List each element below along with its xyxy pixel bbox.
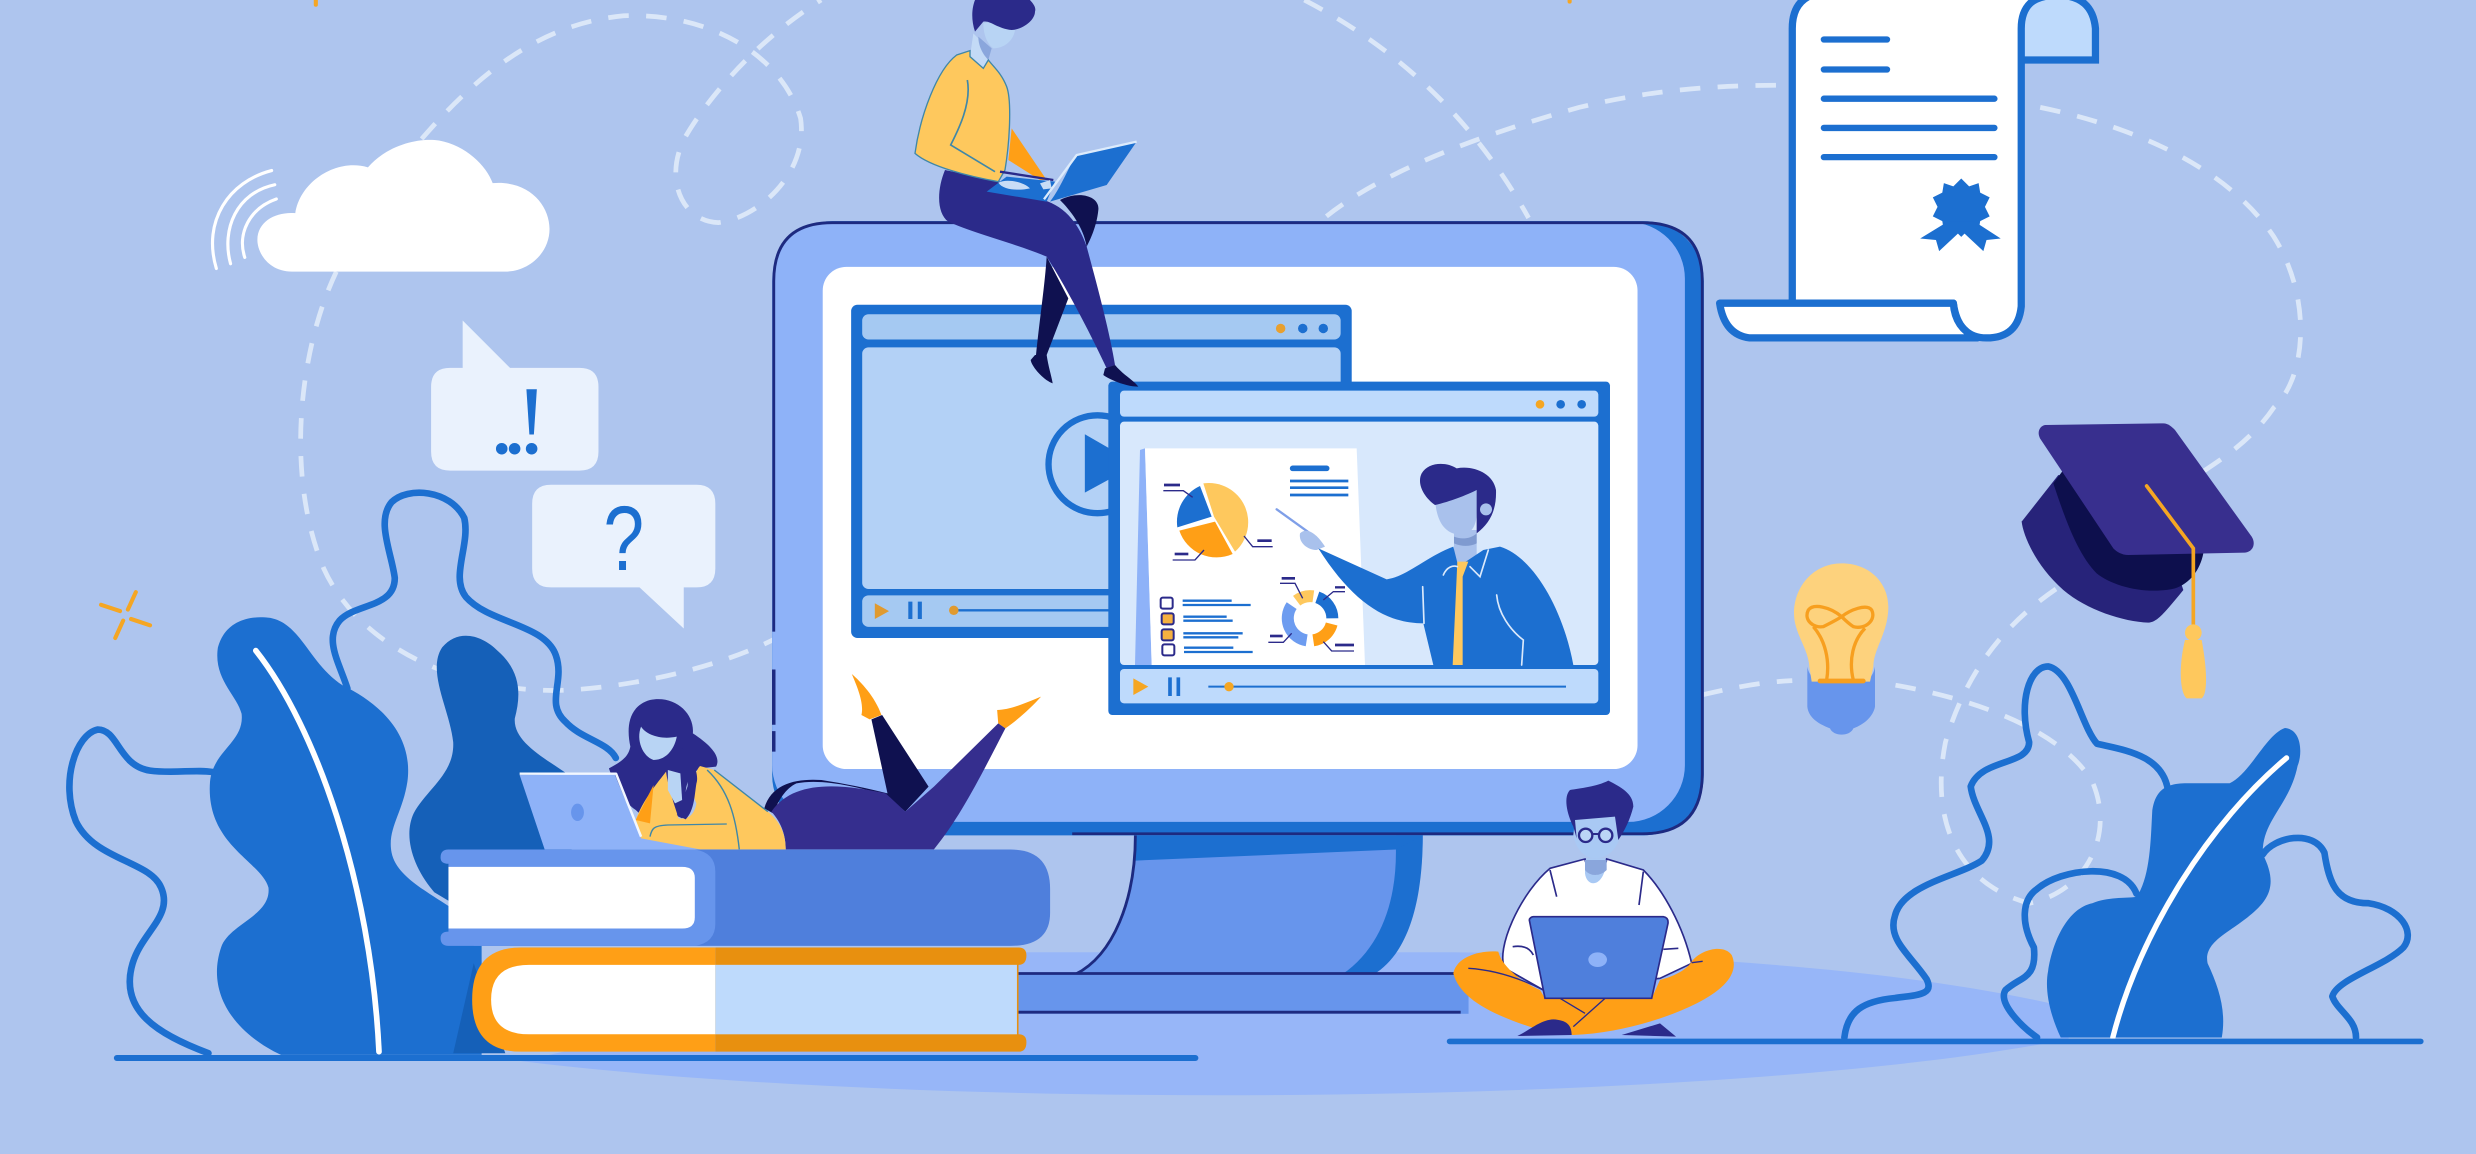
dashed connector paths <box>301 0 2301 903</box>
diploma scroll <box>1720 0 2095 338</box>
face and hair <box>983 23 1015 48</box>
seal <box>1920 178 2001 251</box>
tassel <box>2147 486 2206 698</box>
icon: cloud with wifi arcs <box>213 140 550 272</box>
neck <box>1585 858 1607 883</box>
laptop <box>987 142 1137 202</box>
trousers <box>1453 949 1734 1035</box>
shirt <box>1503 859 1692 990</box>
speech bubble: exclamation: ..! <box>490 367 548 475</box>
monitor stand <box>1019 835 1469 1014</box>
text lines <box>1293 460 1327 477</box>
presentation board <box>1135 448 1365 665</box>
pie chart <box>1163 483 1273 560</box>
ground line, right <box>1450 1040 2421 1043</box>
plant: big leaf <box>210 617 482 1055</box>
icon: light bulb <box>1794 563 1888 735</box>
sweater <box>636 766 786 849</box>
books stack <box>441 850 1050 1053</box>
teacher <box>1277 464 1573 665</box>
hair <box>609 699 717 818</box>
woman lying on books with laptop <box>520 674 1041 849</box>
neck <box>970 33 990 68</box>
orange arm <box>1008 128 1047 180</box>
sweater <box>915 51 1010 182</box>
icon: orange sparkle <box>101 0 1570 638</box>
plant outlines, right <box>1844 666 2408 1037</box>
feet <box>1517 1019 1676 1037</box>
laptop <box>520 773 700 849</box>
bottom book <box>453 963 505 1053</box>
donut chart <box>1268 578 1354 651</box>
video window, back <box>851 305 1352 638</box>
man sitting on monitor with laptop <box>915 0 1138 387</box>
speech bubble: question <box>532 485 715 628</box>
monitor <box>772 221 1704 835</box>
speech bubble: exclamation <box>431 321 598 475</box>
plant: right leaf <box>2047 728 2300 1037</box>
back leg <box>1036 195 1098 355</box>
speech bubble: question: ? <box>603 487 644 590</box>
screen <box>823 267 1638 769</box>
laptop <box>1529 917 1668 998</box>
man with glasses sitting cross-legged <box>1453 781 1734 1037</box>
floor shadow <box>521 952 2069 1095</box>
plant outlines, left <box>69 493 616 1053</box>
ground line, left <box>117 1056 1195 1060</box>
feet <box>852 674 1041 728</box>
checklist <box>1161 598 1253 655</box>
top book <box>474 850 1050 946</box>
icon: graduation cap <box>2022 423 2254 698</box>
trousers <box>771 723 1005 849</box>
back leg and shadow <box>764 715 929 813</box>
plant: dark leaf <box>409 636 572 916</box>
shirt and face <box>668 770 682 803</box>
trousers <box>939 170 1115 368</box>
player controls <box>1133 677 1566 696</box>
text lines <box>1824 39 1994 157</box>
head <box>1566 781 1633 858</box>
video window, front with teacher <box>1108 382 1610 715</box>
